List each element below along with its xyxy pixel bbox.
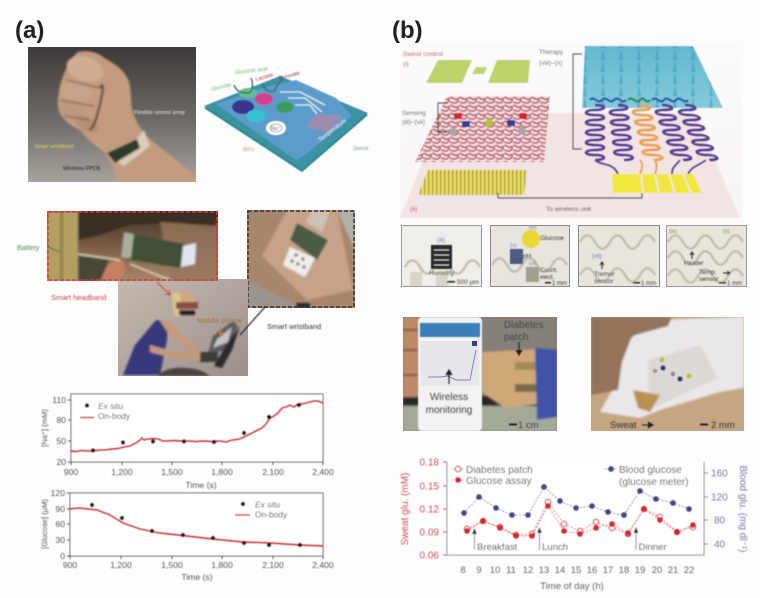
micrograph: glucose and pH sensors: (v) xyxy=(510,243,517,249)
right axis labels: 80 xyxy=(714,516,726,526)
therapy connector pads xyxy=(612,174,702,193)
x axis labels: 1,800 xyxy=(211,560,233,570)
micrograph: tremor sensor: sensor xyxy=(594,278,614,285)
schematic labels: Lactate xyxy=(255,72,274,83)
y axis labels: 0 xyxy=(60,551,65,561)
micrograph: humidity sensor: (iii) xyxy=(437,238,445,244)
left axis labels: 0.09 xyxy=(420,528,439,538)
y axis labels xyxy=(52,395,66,467)
x axis labels: 1,500 xyxy=(161,467,183,477)
micrograph: tremor sensor: 1 mm xyxy=(641,281,656,287)
schematic labels: Pyruvate xyxy=(278,71,300,82)
photo: patch on skin with sweat xyxy=(591,317,744,431)
label: smart wristband: Smart wristband xyxy=(267,322,321,331)
pink substrate xyxy=(400,113,740,218)
sensing array xyxy=(415,96,550,162)
photo: smart headband close-up xyxy=(47,211,218,281)
micrograph: glucose and pH sensors: 1 mm xyxy=(552,281,567,287)
x axis labels: 10 xyxy=(490,565,500,576)
ex situ glucose points xyxy=(90,503,302,547)
x axis labels: 900 xyxy=(64,467,78,477)
photo annotations: Wireless xyxy=(430,392,468,403)
photo: wireless monitoring phone and diabetes patch xyxy=(403,317,557,431)
legend: On-body xyxy=(98,411,131,421)
schematic labels: Glucose xyxy=(211,82,232,93)
x axis labels: 11 xyxy=(506,565,516,576)
x axis labels: 1,800 xyxy=(211,467,233,477)
x axis labels: 2,100 xyxy=(262,560,284,570)
micrograph: humidity sensor xyxy=(401,225,482,287)
y axis labels: 60 xyxy=(55,519,65,529)
micrograph: glucose and pH sensors: elect. xyxy=(540,275,555,281)
legend: On-body xyxy=(255,510,288,520)
photo: woman on exercise bike xyxy=(118,279,248,376)
right axis labels: 40 xyxy=(714,540,726,550)
x axis labels: 9 xyxy=(476,565,482,576)
left axis labels: 0.18 xyxy=(420,458,439,468)
legend: (glucose meter) xyxy=(619,477,688,488)
ex situ sodium points xyxy=(91,403,301,453)
legend: Ex situ xyxy=(98,401,123,411)
x axis labels: 18 xyxy=(619,565,629,576)
legend: Glucose assay xyxy=(466,476,532,487)
schematic labels: Sweat control xyxy=(403,51,443,58)
right axis labels: 120 xyxy=(711,492,728,504)
x axis labels: 22 xyxy=(684,565,694,576)
axis titles: Time (s) xyxy=(185,480,217,490)
legend xyxy=(452,465,688,488)
micrograph: tremor sensor xyxy=(578,225,660,287)
line chart: sweat and blood glucose through the day: Sweat glu. (mM) xyxy=(400,473,411,545)
schematic labels: tBFs xyxy=(243,147,255,153)
x axis labels: 16 xyxy=(587,565,597,576)
series: blood glucose xyxy=(461,484,692,518)
legend: Ex situ xyxy=(255,500,280,510)
x axis labels: 17 xyxy=(603,565,613,576)
photo: smart wristband on fist xyxy=(28,47,196,182)
micrograph: glucose and pH sensors: Glucose xyxy=(540,235,564,242)
schematic labels: Sweat xyxy=(353,146,369,152)
micrograph: heater and temperature sensor: 1 mm xyxy=(727,281,742,287)
diagram: layered patch schematic xyxy=(400,43,742,218)
line chart: glucose over time: [Glucose] (μM) xyxy=(40,499,49,549)
y axis labels: 120 xyxy=(51,488,65,498)
sensor electrodes xyxy=(232,88,294,135)
x axis labels: 20 xyxy=(652,565,662,576)
schematic labels: (viii)–(x) xyxy=(539,60,562,67)
meal arrows and labels xyxy=(472,527,666,553)
photo annotations: 1 cm xyxy=(518,420,539,431)
x axis labels: 2,400 xyxy=(312,560,334,570)
label: smart headband: Smart headband xyxy=(51,293,106,302)
schematic labels: (iii)–(vii) xyxy=(402,119,425,126)
x axis labels: 21 xyxy=(668,565,678,576)
therapy serpentine electrodes xyxy=(586,99,718,174)
micrograph: glucose and pH sensors xyxy=(490,225,570,287)
micrograph: tremor sensor: (vii) xyxy=(592,254,602,260)
diagram: sensor array schematic xyxy=(204,67,369,172)
right axis labels: 160 xyxy=(711,468,728,480)
micrograph: humidity sensor: Humidity xyxy=(429,270,455,277)
micrograph: heater and temperature sensor: sensor xyxy=(699,276,719,283)
photo: smart wristband on fist: Flexible sensor array xyxy=(134,110,185,116)
photo annotations: monitoring xyxy=(426,405,472,416)
line chart: glucose over time xyxy=(40,488,334,582)
photo: smart wristband on fist: Smart wristband xyxy=(34,144,74,150)
left axis labels xyxy=(420,458,439,562)
line chart: sodium over time xyxy=(40,394,334,490)
patch sensor dots xyxy=(653,358,692,382)
y axis labels xyxy=(51,488,65,561)
x axis labels xyxy=(63,560,334,570)
axis titles: Time of day (h) xyxy=(540,581,604,592)
photo: smart wristband close-up xyxy=(247,210,355,308)
schematic labels: Gluconic acid xyxy=(235,67,268,76)
y axis labels: 80 xyxy=(56,415,66,425)
meal arrows and labels: Lunch xyxy=(542,542,568,553)
x axis labels: 19 xyxy=(635,565,645,576)
x axis labels: 1,200 xyxy=(111,467,133,477)
axis titles: Time (s) xyxy=(181,572,213,582)
y axis labels: 30 xyxy=(55,535,65,545)
schematic labels xyxy=(402,49,591,213)
line chart: sweat and blood glucose through the day: Blood glu. (mg dl⁻¹) xyxy=(737,466,748,552)
x axis labels: 14 xyxy=(555,565,565,576)
heading: panel (a): (a) xyxy=(15,17,44,44)
heading: panel (b): (b) xyxy=(392,17,423,44)
line: wristband to phone xyxy=(240,307,265,335)
micrograph: tremor sensor: Tremor xyxy=(594,271,616,278)
photo annotations: Sweat xyxy=(610,420,637,431)
x axis labels: 15 xyxy=(571,565,581,576)
micrograph: glucose and pH sensors: (iv) xyxy=(529,225,537,231)
schematic labels: (ii) xyxy=(410,206,417,213)
x axis labels: 12 xyxy=(523,565,533,576)
label: mobile phone: Mobile phone xyxy=(197,316,242,325)
schematic labels xyxy=(211,67,369,153)
legend xyxy=(80,401,131,421)
y axis labels: 20 xyxy=(56,457,66,467)
schematic labels: (i) xyxy=(403,61,409,68)
series: glucose assay xyxy=(464,503,696,539)
micrograph: heater and temperature sensor: Heater xyxy=(684,260,704,267)
line chart: sodium over time: [Na⁺] (mM) xyxy=(40,409,49,447)
legend xyxy=(235,500,288,520)
right axis labels xyxy=(711,468,728,550)
schematic labels: To wireless unit xyxy=(546,206,591,213)
schematic labels: Therapy xyxy=(539,49,564,56)
sensing connector pads xyxy=(418,170,527,195)
micrograph: heater and temperature sensor: Temp. xyxy=(699,269,717,276)
x axis labels: 2,400 xyxy=(312,467,334,477)
photo annotations: Diabetes xyxy=(504,320,543,331)
meal arrows and labels: Dinner xyxy=(638,542,666,553)
x axis labels: 13 xyxy=(539,565,549,576)
legend: Diabetes patch xyxy=(466,465,533,476)
left axis labels: 0.12 xyxy=(420,504,439,516)
phone xyxy=(418,317,482,431)
photo: smart wristband on fist: Wireless FPCB xyxy=(63,166,101,172)
micrograph: glucose and pH sensors: (vi) xyxy=(529,261,537,267)
x axis labels: 1,500 xyxy=(161,560,183,570)
x axis labels xyxy=(460,565,694,576)
sweat control pads xyxy=(426,60,530,83)
photo annotations: patch xyxy=(504,332,528,343)
therapy sheet xyxy=(582,46,723,108)
series: diabetes patch xyxy=(464,499,696,538)
left axis labels: 0.06 xyxy=(420,550,439,562)
meal arrows and labels: Breakfast xyxy=(477,542,517,553)
micrograph: glucose and pH sensors: Count. xyxy=(540,268,558,274)
photo annotations: 2 mm xyxy=(711,420,735,431)
schematic labels: Temperature xyxy=(318,118,348,144)
sensor electrodes: Na⁺ xyxy=(271,126,280,132)
on-body sodium curve xyxy=(71,401,323,452)
x axis labels: 1,200 xyxy=(110,560,132,570)
y axis labels: 90 xyxy=(55,504,65,514)
y axis labels: 110 xyxy=(52,395,66,405)
y axis labels: 50 xyxy=(56,436,66,446)
x axis labels: 900 xyxy=(63,560,77,570)
micrograph: heater and temperature sensor: (x) xyxy=(723,229,730,235)
micrograph: heater and temperature sensor xyxy=(666,225,747,287)
schematic labels: Sensing xyxy=(402,110,426,117)
photo annotations xyxy=(610,420,735,431)
woman photo connectors and labels xyxy=(17,245,321,336)
label: battery: Battery xyxy=(17,245,40,252)
x axis labels xyxy=(64,467,334,477)
micrograph: glucose and pH sensors: pH xyxy=(523,253,532,260)
arrow: mobile phone xyxy=(219,327,223,336)
legend: Blood glucose xyxy=(619,465,682,476)
x axis labels: 8 xyxy=(460,565,466,576)
photo annotations xyxy=(426,320,543,431)
on-body glucose curve xyxy=(69,508,323,546)
left axis labels: 0.15 xyxy=(420,482,439,492)
micrograph: heater and temperature sensor: (ix) xyxy=(669,229,677,235)
line chart: sweat and blood glucose through the day xyxy=(400,458,748,592)
brackets xyxy=(438,54,642,198)
x axis labels: 2,100 xyxy=(262,467,284,477)
micrograph: humidity sensor: 500 μm xyxy=(457,279,479,286)
arrow: headband to woman xyxy=(157,282,170,295)
